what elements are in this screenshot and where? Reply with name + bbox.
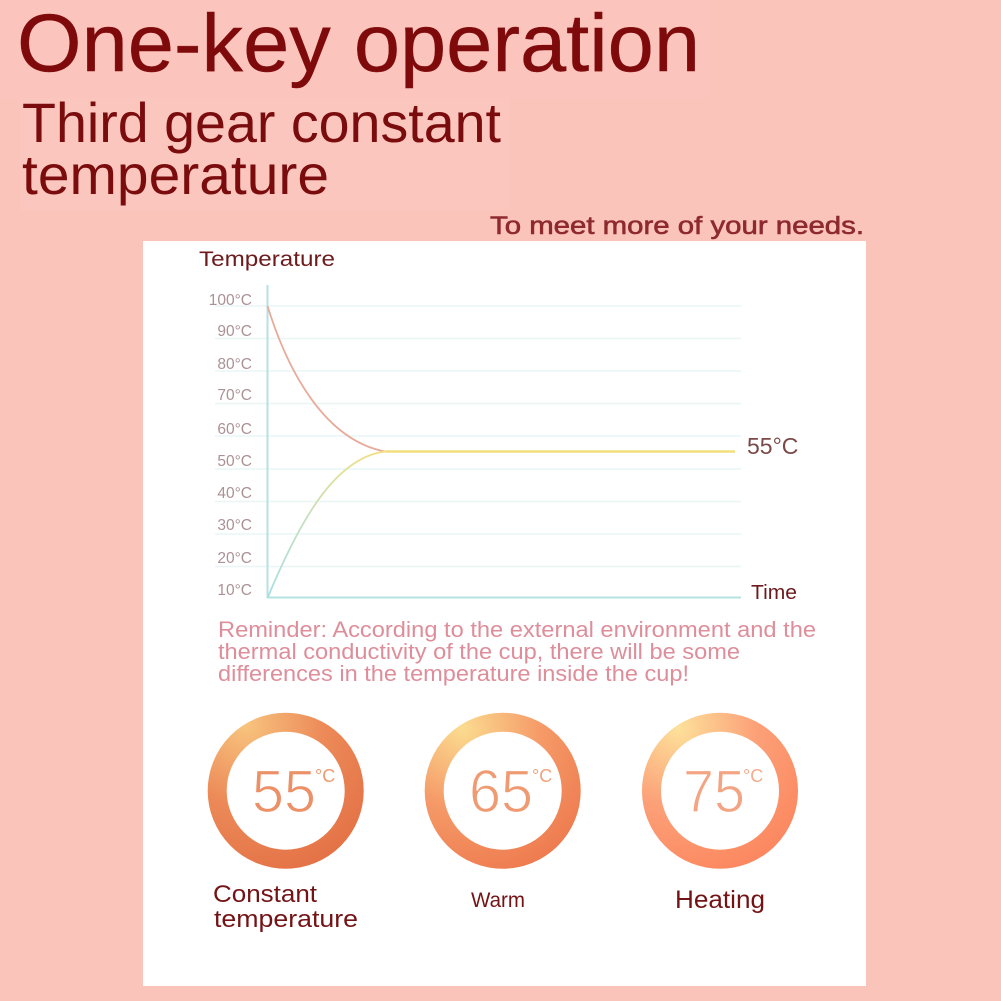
heating curve [268,452,385,598]
axis title: temperature: Temperature [199,248,335,271]
label: 55°C: 55°C [747,433,798,459]
caption: Heating [675,886,765,914]
constant temperature line [385,450,735,453]
gear: 55°C constant temperature [213,722,358,933]
y axis labels: 100°C [209,292,252,309]
reminder text: differences in the temperature inside the cup! [218,661,689,686]
ring [217,722,354,859]
y axis labels: 90°C [217,323,252,340]
gear: 65°C warm [434,722,571,912]
chart: temperature over time [199,248,798,604]
subtitle: Third gear constant [22,91,501,154]
axis title: time: Time [751,582,797,604]
title backing patch [0,0,710,98]
y axis labels: 60°C [217,421,252,438]
caption: Constant [213,881,317,908]
axes [267,285,741,598]
subtitle [22,91,501,206]
reminder text: thermal conductivity of the cup, there will be some [218,639,740,664]
y axis labels: 80°C [217,356,252,373]
reminder text: Reminder: According to the external environment and the [218,617,816,642]
panel: white content card [143,241,866,986]
y axis labels: 70°C [217,387,252,404]
y axis labels: 50°C [217,453,252,470]
gear: 55°C constant temperature: °C [315,766,335,786]
gear: 75°C heating [652,722,788,914]
caption: temperature [214,906,358,933]
y axis labels: 20°C [217,550,252,567]
y axis labels: 30°C [217,517,252,534]
reading: 55 [252,758,316,825]
y axis labels: 40°C [217,485,252,502]
reading: 75 [683,758,745,825]
reading: 65 [469,758,533,825]
y axis labels: 10°C [217,582,252,599]
reminder text [218,617,816,686]
ring [652,722,788,859]
subtitle: temperature [22,143,329,206]
ring [434,722,571,859]
gear: 75°C heating: °C [743,766,763,786]
caption: Warm [471,889,525,912]
title: One-key operation [17,0,700,89]
gear: 65°C warm: °C [532,766,552,786]
subtitle backing patch [20,98,510,210]
cooling curve [268,306,385,452]
caption [213,881,358,933]
tagline: To meet more of your needs. [490,212,864,240]
y axis labels [209,292,252,599]
